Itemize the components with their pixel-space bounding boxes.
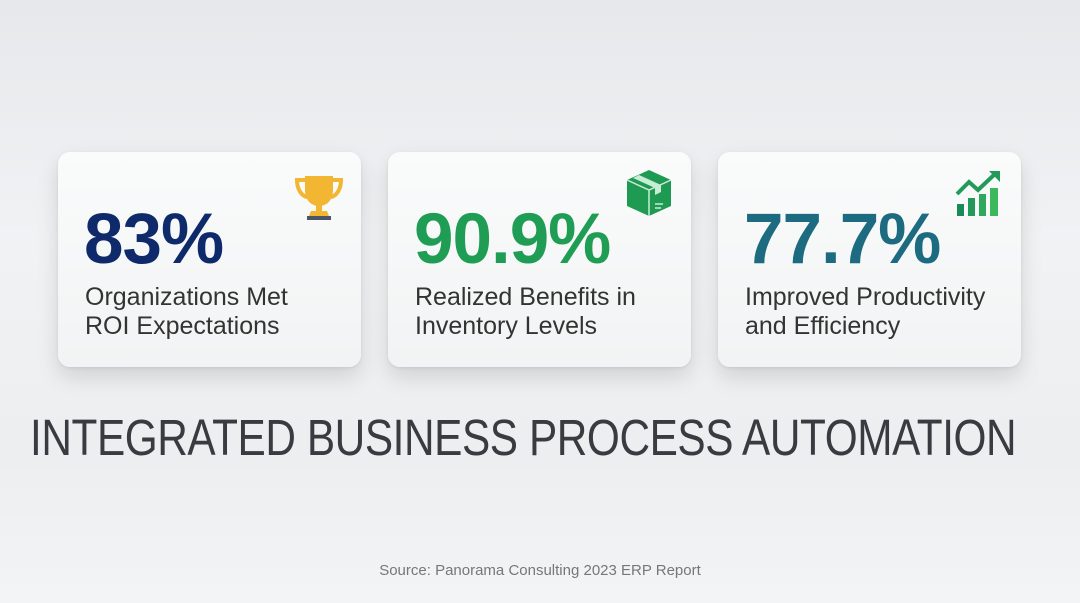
label ROI: ROI Expectations xyxy=(85,312,280,340)
icon: growth chart xyxy=(956,171,1000,216)
icon: trophy xyxy=(295,176,343,220)
label ROI: Organizations Met xyxy=(85,283,288,311)
card: productivity xyxy=(718,152,1021,367)
label inventory xyxy=(415,283,636,340)
stat 77.7%: 77.7% xyxy=(744,200,940,279)
source: Source: Panorama Consulting 2023 ERP Report xyxy=(379,562,701,579)
stat 83%: 83% xyxy=(84,200,223,279)
label inventory: Realized Benefits in xyxy=(415,283,636,311)
label productivity: and Efficiency xyxy=(745,312,900,340)
card: ROI xyxy=(58,152,361,367)
label productivity: Improved Productivity xyxy=(745,283,985,311)
label inventory: Inventory Levels xyxy=(415,312,597,340)
icon: box xyxy=(626,170,672,216)
label productivity xyxy=(745,283,986,340)
title: INTEGRATED BUSINESS PROCESS AUTOMATION xyxy=(30,409,1016,466)
card: inventory xyxy=(388,152,691,367)
stat 90.9%: 90.9% xyxy=(414,200,610,279)
label ROI xyxy=(85,283,288,340)
